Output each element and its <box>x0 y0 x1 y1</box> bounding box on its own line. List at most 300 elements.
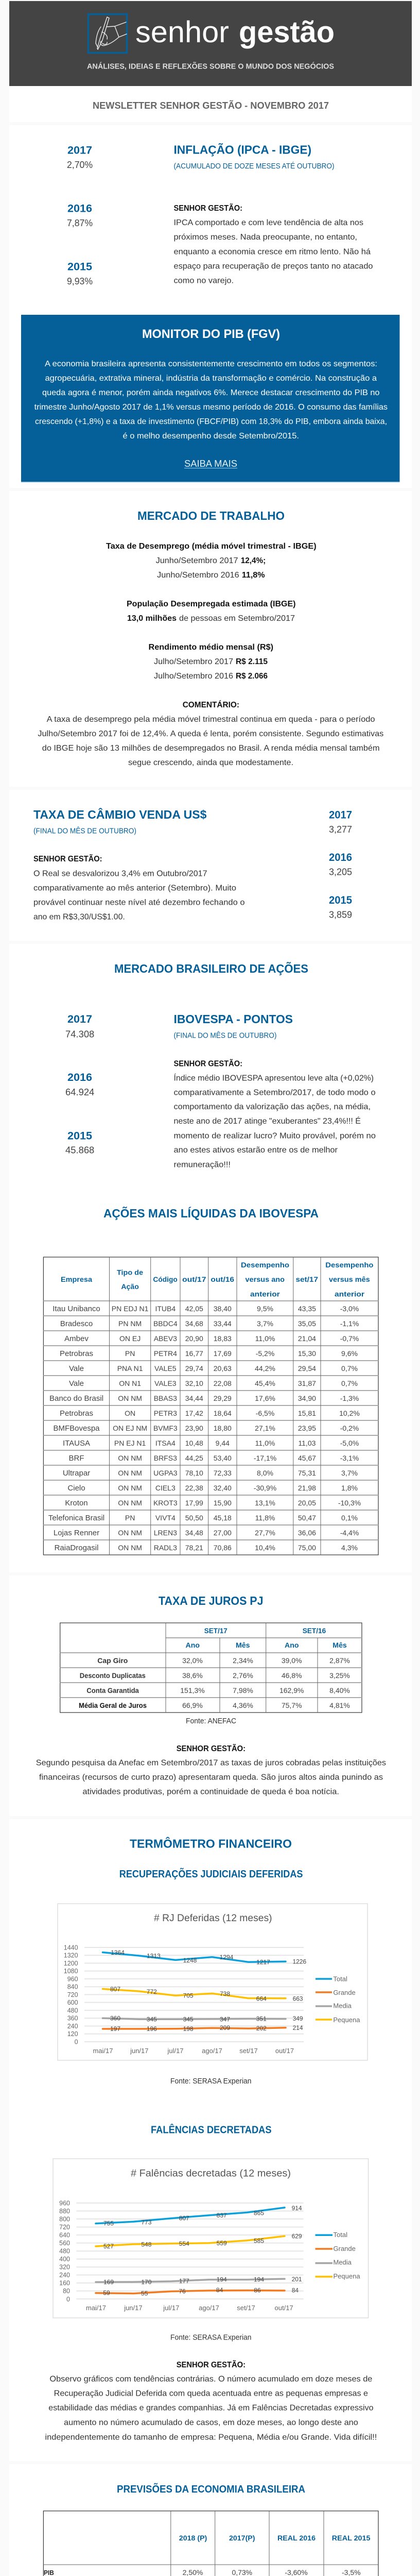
y axis labels: 960 <box>67 1975 78 1982</box>
inflation yearly figures: 7,87% <box>67 218 93 228</box>
table body rows: Petrobras <box>60 1409 93 1418</box>
table body rows: CIEL3 <box>155 1484 176 1492</box>
table body rows: ON EJ <box>119 1334 141 1343</box>
table body rows: Conta Garantida <box>86 1686 139 1694</box>
panel: economic forecasts <box>9 2464 412 2576</box>
table body rows: 23,95 <box>298 1424 316 1432</box>
series: media: 177 <box>179 2277 189 2284</box>
series: media: 169 <box>103 2278 114 2285</box>
table body rows: 4,36% <box>233 1701 253 1709</box>
heading: financial thermometer: TERMÔMETRO FINANCEIRO <box>130 1837 292 1851</box>
series: grande: 198 <box>183 2025 194 2032</box>
exchange rate yearly figures: 3,205 <box>329 867 352 877</box>
text block: labour comment: do IBGE hoje são 13 milhões de desempregados no Brasil. A renda média mensal também <box>42 744 380 753</box>
table body rows: BBAS3 <box>154 1394 177 1402</box>
table body rows: -5,2% <box>256 1349 274 1358</box>
text block: inflation comment: como no varejo. <box>174 276 234 285</box>
y axis labels <box>64 1944 78 2045</box>
heading: most liquid stocks: AÇÕES MAIS LÍQUIDAS DA IBOVESPA <box>103 1206 319 1220</box>
table body rows: -3,1% <box>340 1454 359 1462</box>
table body rows: 8,0% <box>257 1469 273 1477</box>
panel: corporate interest rates <box>9 1575 412 1816</box>
table body rows: ITSA4 <box>155 1439 176 1447</box>
inflation yearly figures: 2017 <box>67 144 92 157</box>
series: media: 194 <box>217 2276 227 2283</box>
table header rows: Mês <box>332 1641 347 1649</box>
table body rows: ON <box>125 1409 135 1417</box>
table: interest rates <box>60 1623 362 1713</box>
heading: forecasts: PREVISÕES DA ECONOMIA BRASILEIRA <box>117 2483 305 2495</box>
table body rows: 18,80 <box>214 1424 232 1432</box>
table body rows: BVMF3 <box>153 1424 178 1432</box>
heading: exchange rate: TAXA DE CÂMBIO VENDA US$ <box>33 807 207 821</box>
text block: thermometer comment <box>45 2359 377 2442</box>
table body rows: Desconto Duplicatas <box>80 1671 146 1680</box>
series: pequena <box>96 2233 302 2250</box>
table body rows: UGPA3 <box>153 1469 178 1477</box>
text block: ibovespa comment: comparativamente a Setembro/2017, de todo modo o <box>174 1088 376 1097</box>
text block: thermometer comment: independentemente do tamanho de empresa: Pequena, Média e/ou Grande. Vida difícil!! <box>45 2433 377 2442</box>
table body rows: 3,7% <box>257 1319 273 1328</box>
table body rows: 11,0% <box>255 1334 275 1343</box>
table body rows: 11,03 <box>298 1439 316 1447</box>
series: pequena: 705 <box>183 1992 194 1999</box>
inflation yearly figures <box>67 144 93 286</box>
legend: Total <box>334 2231 347 2239</box>
series: media: 347 <box>220 2016 230 2023</box>
table body rows: Itau Unibanco <box>52 1304 100 1313</box>
text block: unemployment rate <box>106 542 317 580</box>
inflation yearly figures: 2015 <box>67 261 92 273</box>
text block: interest rate comment: SENHOR GESTÃO: <box>177 1743 246 1753</box>
text block: average income: Julho/Setembro 2016 <box>154 672 233 681</box>
table body rows: ON NM <box>118 1394 142 1402</box>
table body rows: PN NM <box>118 1319 142 1328</box>
table header row <box>61 1261 374 1298</box>
table body rows: RaiaDrogasil <box>55 1544 98 1552</box>
table body rows: 50,50 <box>185 1514 203 1522</box>
table body rows: Lojas Renner <box>54 1529 99 1537</box>
text block: exchange rate comment: SENHOR GESTÃO: <box>33 853 102 863</box>
table body rows: 34,90 <box>298 1394 316 1402</box>
table header rows: Ano <box>285 1641 299 1649</box>
table header rows <box>185 1626 347 1649</box>
text block: average income: R$ 2.066 <box>236 672 268 681</box>
series: pequena: 585 <box>254 2237 264 2244</box>
table body rows: 50,47 <box>298 1514 316 1522</box>
y axis labels: 880 <box>59 2208 70 2215</box>
legend: Media <box>334 2259 352 2266</box>
table body rows: 3,7% <box>341 1469 358 1477</box>
ibovespa yearly figures: 2016 <box>67 1072 92 1083</box>
x axis labels: out/17 <box>275 2047 294 2055</box>
series: pequena: 548 <box>141 2241 152 2248</box>
series: grande: 76 <box>179 2288 186 2295</box>
table body rows: -4,4% <box>340 1529 359 1537</box>
legend: Grande <box>334 2245 356 2252</box>
table header row: out/17 <box>182 1275 206 1283</box>
series: grande: 86 <box>254 2286 261 2294</box>
heading: stock market: MERCADO BRASILEIRO DE AÇÕES <box>114 961 308 975</box>
table body rows: 20,05 <box>298 1499 316 1507</box>
table body rows: 70,86 <box>214 1544 232 1552</box>
text block: GDP monitor: agropecuária, extrativa mineral, indústria da transformação e comércio. Na construção a <box>45 374 377 383</box>
table header rows: SET/16 <box>303 1626 326 1635</box>
table header row: REAL 2016 <box>277 2534 316 2542</box>
series: pequena: 664 <box>256 1995 267 2003</box>
table body rows: 13,1% <box>255 1499 275 1507</box>
tagline: ANÁLISES, IDEIAS E REFLEXÕES SOBRE O MUNDO DOS NEGÓCIOS <box>87 62 334 71</box>
series: total: 865 <box>254 2209 264 2216</box>
exchange rate yearly figures: 2016 <box>329 852 352 863</box>
table body rows: BMFBovespa <box>53 1424 100 1433</box>
subheading: judicial recoveries: RECUPERAÇÕES JUDICIAIS DEFERIDAS <box>119 1868 303 1880</box>
legend: Pequena <box>333 2016 360 2024</box>
table body rows: 0,7% <box>341 1364 358 1372</box>
table body rows: Cielo <box>67 1484 85 1493</box>
table body rows: Petrobras <box>60 1349 93 1358</box>
y axis labels: 400 <box>59 2256 70 2263</box>
text block: inflation comment: enquanto a economia cresce em ritmo lento. Não há <box>174 247 371 257</box>
table body rows: 2,34% <box>233 1656 253 1665</box>
table body rows: 35,05 <box>298 1319 316 1328</box>
y axis labels: 640 <box>59 2232 70 2239</box>
table header row: Empresa <box>61 1275 92 1283</box>
text block: average income: Rendimento médio mensal (R$) <box>148 643 273 652</box>
table body rows: 9,44 <box>216 1439 230 1447</box>
y axis labels: 240 <box>59 2272 70 2279</box>
y axis labels: 480 <box>59 2248 70 2255</box>
series: pequena: 554 <box>179 2240 189 2247</box>
table body rows: 78,21 <box>185 1544 203 1552</box>
table header row <box>179 2534 371 2542</box>
table body rows: 42,05 <box>185 1304 203 1313</box>
text block: unemployment rate: 11,8% <box>242 571 265 580</box>
chart title: # RJ Deferidas (12 meses) <box>154 1913 272 1924</box>
table body rows: 17,42 <box>185 1409 203 1417</box>
heading: newsletter title: NEWSLETTER SENHOR GESTÃO - NOVEMBRO 2017 <box>93 100 329 111</box>
table body rows: 20,63 <box>214 1364 232 1372</box>
source: serasa: Fonte: SERASA Experian <box>170 2333 251 2342</box>
text block: labour comment: A taxa de desemprego pela média móvel trimestral continua em queda - para o período <box>47 715 375 724</box>
table body rows <box>48 1304 361 1552</box>
exchange rate yearly figures: 2015 <box>329 894 352 906</box>
x axis labels: jul/17 <box>167 2047 184 2055</box>
heading: interest rates: TAXA DE JUROS PJ <box>159 1594 264 1607</box>
series: media: 194 <box>254 2276 264 2283</box>
table body rows: 21,04 <box>298 1334 316 1343</box>
text block: exchange rate comment: comparativamente ao mês anterior (Setembro). Muito <box>33 884 236 893</box>
table body rows: Kroton <box>65 1499 88 1507</box>
y axis labels: 0 <box>75 2038 78 2045</box>
table body rows: 45,67 <box>298 1454 316 1462</box>
table header rows: SET/17 <box>204 1626 227 1635</box>
table header row: Tipo de <box>117 1268 143 1277</box>
y axis labels: 0 <box>66 2296 70 2303</box>
heading: labour market: MERCADO DE TRABALHO <box>137 509 285 522</box>
ibovespa yearly figures <box>65 1013 94 1156</box>
y axis labels: 1080 <box>64 1968 78 1975</box>
table body rows: -0,7% <box>340 1334 359 1343</box>
y axis labels: 80 <box>63 2287 70 2295</box>
y axis labels: 840 <box>67 1984 78 1991</box>
table body rows: BBDC4 <box>153 1319 178 1328</box>
text block: inflation comment: IPCA comportado e com leve tendência de alta nos <box>174 218 363 227</box>
table header row: 2017(P) <box>229 2534 255 2542</box>
series: pequena: 527 <box>103 2243 114 2250</box>
y axis labels: 160 <box>59 2280 70 2287</box>
series: media: 170 <box>141 2278 152 2285</box>
table header row: set/17 <box>295 1275 318 1283</box>
text block: unemployment rate: Junho/Setembro 2017 <box>156 556 238 565</box>
series: pequena: 559 <box>217 2240 227 2247</box>
exchange rate yearly figures: 3,859 <box>329 910 352 920</box>
logo wordmark <box>135 15 335 49</box>
ibovespa yearly figures: 2017 <box>67 1013 92 1025</box>
table body rows: 38,6% <box>182 1671 203 1680</box>
table body rows: 27,00 <box>214 1529 232 1537</box>
table body rows: Telefonica Brasil <box>48 1514 104 1522</box>
series: total: 1226 <box>292 1958 306 1965</box>
text block: labour comment: Julho/Setembro 2017 foi de 12,4%. A queda é lenta, porém consistente. Segundo estimativas <box>38 730 383 738</box>
table header row: anterior <box>335 1290 365 1298</box>
table body rows: 75,31 <box>298 1469 316 1477</box>
x axis labels: jun/17 <box>130 2047 149 2055</box>
panel: financial thermometer <box>9 1819 412 2461</box>
table body rows: -3,0% <box>340 1304 359 1313</box>
text block: interest rate comment <box>36 1743 386 1797</box>
text block: exchange rate comment: provável continuar neste nível até dezembro fechando o <box>33 899 245 907</box>
table body rows: -6,5% <box>256 1409 274 1417</box>
table body rows: -17,1% <box>254 1454 276 1462</box>
table body rows: 27,1% <box>255 1424 275 1432</box>
table body rows: 39,0% <box>282 1656 302 1665</box>
table body rows: Ultrapar <box>63 1469 90 1478</box>
table header row: anterior <box>250 1290 280 1298</box>
table header row: out/16 <box>211 1275 234 1283</box>
series: media: 351 <box>256 2015 267 2023</box>
table body rows: 1,8% <box>341 1484 358 1492</box>
table body rows: 18,83 <box>214 1334 232 1343</box>
table body rows: VIVT4 <box>155 1514 176 1522</box>
text block: GDP monitor: crescendo (+1,8%) e a taxa de investimento (FBCF/PIB) com 18,3% do PIB, embora ainda baixa, <box>35 417 387 426</box>
series: media: 345 <box>183 2016 194 2023</box>
table body rows: ON NM <box>118 1484 142 1492</box>
table body rows: ON NM <box>118 1454 142 1462</box>
table body rows: 46,8% <box>282 1671 302 1680</box>
table body rows: 11,8% <box>255 1514 275 1522</box>
table body rows: -1,1% <box>340 1319 359 1328</box>
y axis labels: 1320 <box>64 1952 78 1959</box>
text block: thermometer comment: Observo gráficos com tendências contrárias. O número acumulado em doze meses de <box>49 2375 373 2384</box>
text block: interest rate comment: financeiras (recursos de curto prazo) apresentaram queda. São juros altos ainda punindo as <box>39 1773 383 1782</box>
y axis labels: 960 <box>59 2200 70 2207</box>
y axis labels: 480 <box>67 2007 78 2014</box>
y axis labels: 600 <box>67 1999 78 2006</box>
table body rows: 29,54 <box>298 1364 316 1372</box>
series: total: 807 <box>179 2215 189 2222</box>
table body rows: Média Geral de Juros <box>79 1701 147 1709</box>
text block: ibovespa comment: remuneração!!! <box>174 1161 231 1170</box>
table body rows: 11,0% <box>255 1439 275 1447</box>
table body rows: Vale <box>69 1364 84 1373</box>
text block: GDP monitor: trimestre Junho/Agosto 2017 de 1,1% versus mesmo período de 2016. O consumo das famílias <box>34 403 388 412</box>
table body rows: 17,6% <box>255 1394 275 1402</box>
logo wordmark: senhor <box>135 15 229 49</box>
series: total <box>103 1949 306 1966</box>
table body rows: 20,90 <box>185 1334 203 1343</box>
table body rows: PNA N1 <box>117 1364 143 1372</box>
table body rows: 9,6% <box>341 1349 358 1358</box>
y axis labels: 560 <box>59 2240 70 2247</box>
series: grande <box>96 2286 299 2297</box>
series: total: 1294 <box>220 1954 234 1961</box>
text block: inflation comment: SENHOR GESTÃO: <box>174 202 242 213</box>
table body rows: Cap Giro <box>97 1656 128 1665</box>
exchange rate yearly figures: 2017 <box>329 809 352 821</box>
table body rows: VALE5 <box>154 1364 177 1372</box>
legend <box>316 1975 360 2024</box>
series: grande: 59 <box>103 2289 110 2296</box>
series: media <box>103 2015 303 2023</box>
table header row: REAL 2015 <box>332 2534 371 2542</box>
series: grande: 196 <box>147 2025 157 2032</box>
line chart: judicial recoveries granted <box>58 1904 367 2060</box>
table body rows: 4,81% <box>329 1701 350 1709</box>
exchange rate yearly figures: 3,277 <box>329 824 352 835</box>
table body rows: 10,4% <box>255 1544 275 1552</box>
table values <box>183 2568 363 2576</box>
text block: ibovespa comment <box>174 1058 376 1170</box>
table body rows: ON NM <box>118 1544 142 1552</box>
x axis labels: ago/17 <box>202 2047 222 2055</box>
panel: labour market <box>9 491 412 787</box>
text block: average income: R$ 2.115 <box>236 657 268 666</box>
table body rows: 9,5% <box>257 1304 273 1313</box>
legend: Grande <box>333 1989 356 1996</box>
table: forecasts <box>43 2511 378 2576</box>
table body rows: 2,76% <box>233 1671 253 1680</box>
table body rows: PN <box>125 1514 135 1522</box>
inflation yearly figures: 9,93% <box>67 276 93 286</box>
series: total: 914 <box>292 2205 302 2212</box>
y axis labels: 360 <box>67 2015 78 2022</box>
text block: unemployed population <box>127 600 295 623</box>
x axis labels: mai/17 <box>86 2304 106 2312</box>
series: media: 345 <box>147 2016 157 2023</box>
text block: interest rate comment: Segundo pesquisa da Anefac em Setembro/2017 as taxas de juros cobradas pelas instituições <box>36 1759 386 1768</box>
table body rows: 0,7% <box>341 1379 358 1387</box>
table body rows: 27,7% <box>255 1529 275 1537</box>
legend: Media <box>333 2002 352 2009</box>
x axis labels: ago/17 <box>199 2304 219 2312</box>
legend: Total <box>333 1975 347 1982</box>
table body rows: 33,44 <box>214 1319 232 1328</box>
line chart: bankruptcies declared <box>53 2159 369 2318</box>
table body rows: 44,2% <box>255 1364 275 1372</box>
logo icon: hand writing with pen <box>89 14 127 53</box>
table body rows: 32,40 <box>214 1484 232 1492</box>
subheading: exchange rate period: (FINAL DO MÊS DE OUTUBRO) <box>33 827 136 836</box>
y axis labels: 1440 <box>64 1944 78 1952</box>
table body rows: PETR4 <box>154 1349 177 1358</box>
x axis labels <box>93 2047 294 2055</box>
table body rows: 38,40 <box>214 1304 232 1313</box>
y axis labels: 800 <box>59 2215 70 2223</box>
series: grande: 202 <box>256 2025 267 2032</box>
text block: ibovespa comment: comportamento da valorização das ações, na média, <box>174 1103 371 1111</box>
text block: labour comment <box>38 700 383 767</box>
x axis labels: jul/17 <box>163 2304 179 2312</box>
table: most liquid stocks <box>43 1257 378 1555</box>
panel: newsletter title <box>9 86 412 122</box>
table body rows: -1,3% <box>340 1394 359 1402</box>
text block: average income: Julho/Setembro 2017 <box>154 657 233 666</box>
series: total: 1248 <box>183 1957 197 1964</box>
text block: thermometer comment: SENHOR GESTÃO: <box>177 2359 246 2369</box>
x axis labels: mai/17 <box>93 2047 113 2055</box>
text block: GDP monitor <box>34 360 388 440</box>
text block: ibovespa comment: momento de realizar lucro? Muito provável, porém no <box>174 1131 376 1141</box>
table body rows: 151,3% <box>180 1686 205 1694</box>
series: grande: 55 <box>141 2290 148 2297</box>
table body rows <box>79 1656 350 1709</box>
table body rows: 18,64 <box>214 1409 232 1417</box>
y axis labels <box>59 2200 70 2303</box>
table body rows: 45,18 <box>214 1514 232 1522</box>
text block: inflation comment <box>174 202 373 285</box>
table header row: Desempenho <box>241 1261 289 1269</box>
inflation yearly figures: 2016 <box>67 203 92 214</box>
table header row: Desempenho <box>325 1261 374 1269</box>
table header row: versus mês <box>329 1275 370 1283</box>
table body rows: 45,4% <box>255 1379 275 1387</box>
series: grande: 214 <box>293 2024 303 2031</box>
text block: GDP monitor: é o melho desempenho desde Setembro/2015. <box>122 432 299 440</box>
table body rows: BRFS3 <box>154 1454 177 1462</box>
table body rows: Bradesco <box>60 1319 93 1328</box>
callout: GDP monitor <box>21 315 399 482</box>
table body rows: 8,40% <box>329 1686 350 1694</box>
table body rows: 34,48 <box>185 1529 203 1537</box>
x axis labels: set/17 <box>237 2304 255 2312</box>
table body rows: ON NM <box>118 1499 142 1507</box>
source: ANEFAC: Fonte: ANEFAC <box>186 1717 236 1725</box>
table header row: Ação <box>121 1282 139 1291</box>
series: grande: 84 <box>292 2286 299 2294</box>
table body rows: ON NM <box>118 1529 142 1537</box>
table body rows: 32,0% <box>182 1656 203 1665</box>
table header rows: Mês <box>236 1641 250 1649</box>
subheading: ibovespa period: (FINAL DO MÊS DE OUTUBRO) <box>174 1031 277 1040</box>
text block: thermometer comment: aumento no número acumulado de casos, em doze meses, ao longo deste ano <box>64 2418 358 2427</box>
series: pequena <box>103 1986 303 2003</box>
table body rows: 16,77 <box>185 1349 203 1358</box>
table body rows: 75,7% <box>282 1701 302 1709</box>
heading: GDP monitor: MONITOR DO PIB (FGV) <box>142 327 280 341</box>
text block: unemployment rate: Taxa de Desemprego (média móvel trimestral - IBGE) <box>106 542 317 551</box>
panel: inflation and GDP monitor <box>9 125 412 488</box>
logo wordmark: gestão <box>239 15 335 49</box>
table body rows: 34,68 <box>185 1319 203 1328</box>
table body rows: 15,90 <box>214 1499 232 1507</box>
text block: ibovespa comment: SENHOR GESTÃO: <box>174 1058 242 1068</box>
table body rows: 36,06 <box>298 1529 316 1537</box>
series: total <box>96 2205 302 2227</box>
table body rows: 22,38 <box>185 1484 203 1492</box>
ibovespa yearly figures: 2015 <box>67 1130 92 1142</box>
y axis labels: 120 <box>67 2030 78 2038</box>
